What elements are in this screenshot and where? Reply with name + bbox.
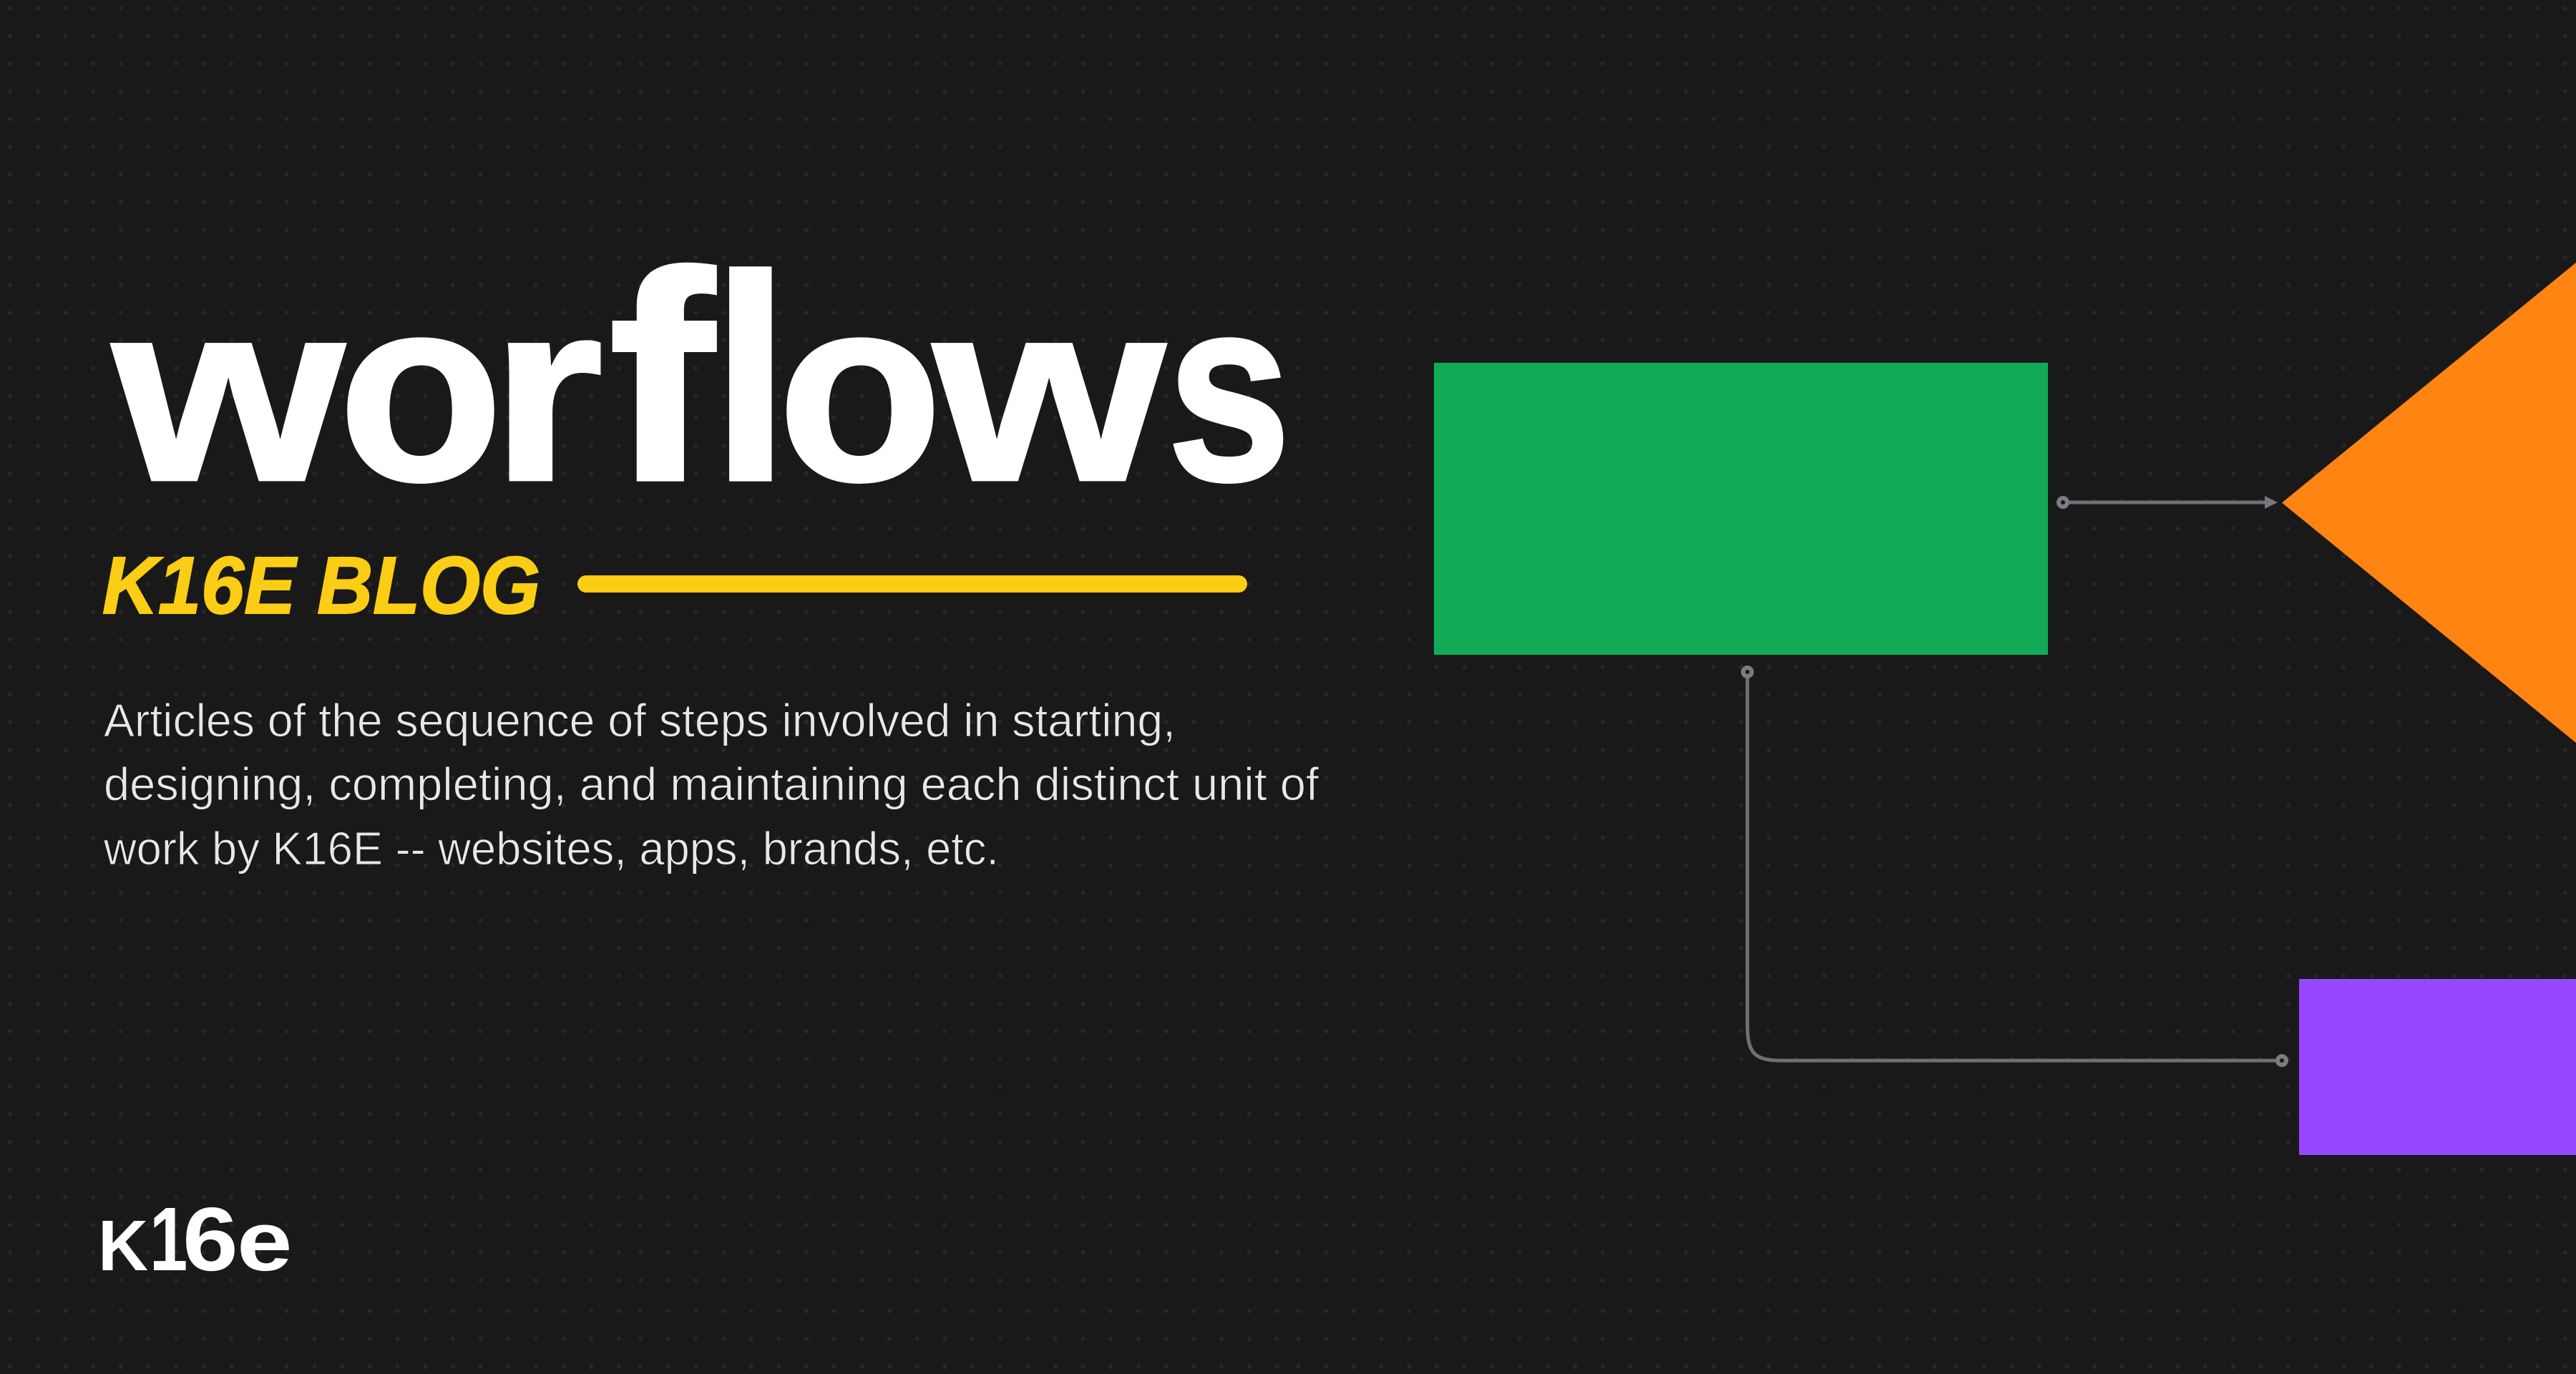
title: worflows: f	[609, 211, 714, 542]
title: worflows: w	[113, 248, 344, 534]
description paragraph: designing, completing, and maintaining each distinct unit of	[104, 758, 1319, 810]
purple process box	[2299, 979, 2576, 1155]
logo: k16e: 6	[182, 1189, 238, 1290]
logo: k16e: K	[98, 1206, 148, 1286]
green process box	[1434, 363, 2048, 655]
logo: k16e: 1	[150, 1189, 187, 1290]
logo: k16e	[98, 1189, 292, 1290]
orange decision diamond	[2282, 263, 2576, 743]
description paragraph: Articles of the sequence of steps involved in starting,	[104, 694, 1176, 746]
title: worflows: r	[491, 248, 603, 534]
title: worflows: l	[711, 216, 790, 542]
description paragraph	[103, 694, 1319, 874]
title: worflows: w	[934, 248, 1165, 534]
arrow: green box to orange diamond	[2059, 496, 2278, 509]
yellow rule	[577, 575, 1247, 593]
subtitle: K16E BLOG: K16E BLOG	[102, 540, 540, 630]
connector: green box to purple box	[1743, 668, 2286, 1065]
title: worflows: o	[778, 243, 942, 535]
title: worflows: o	[338, 243, 503, 535]
title: worflows	[109, 211, 1291, 542]
title: worflows: s	[1167, 243, 1291, 535]
description paragraph: work by K16E -- websites, apps, brands, etc.	[103, 822, 999, 874]
logo: k16e: e	[237, 1194, 292, 1289]
